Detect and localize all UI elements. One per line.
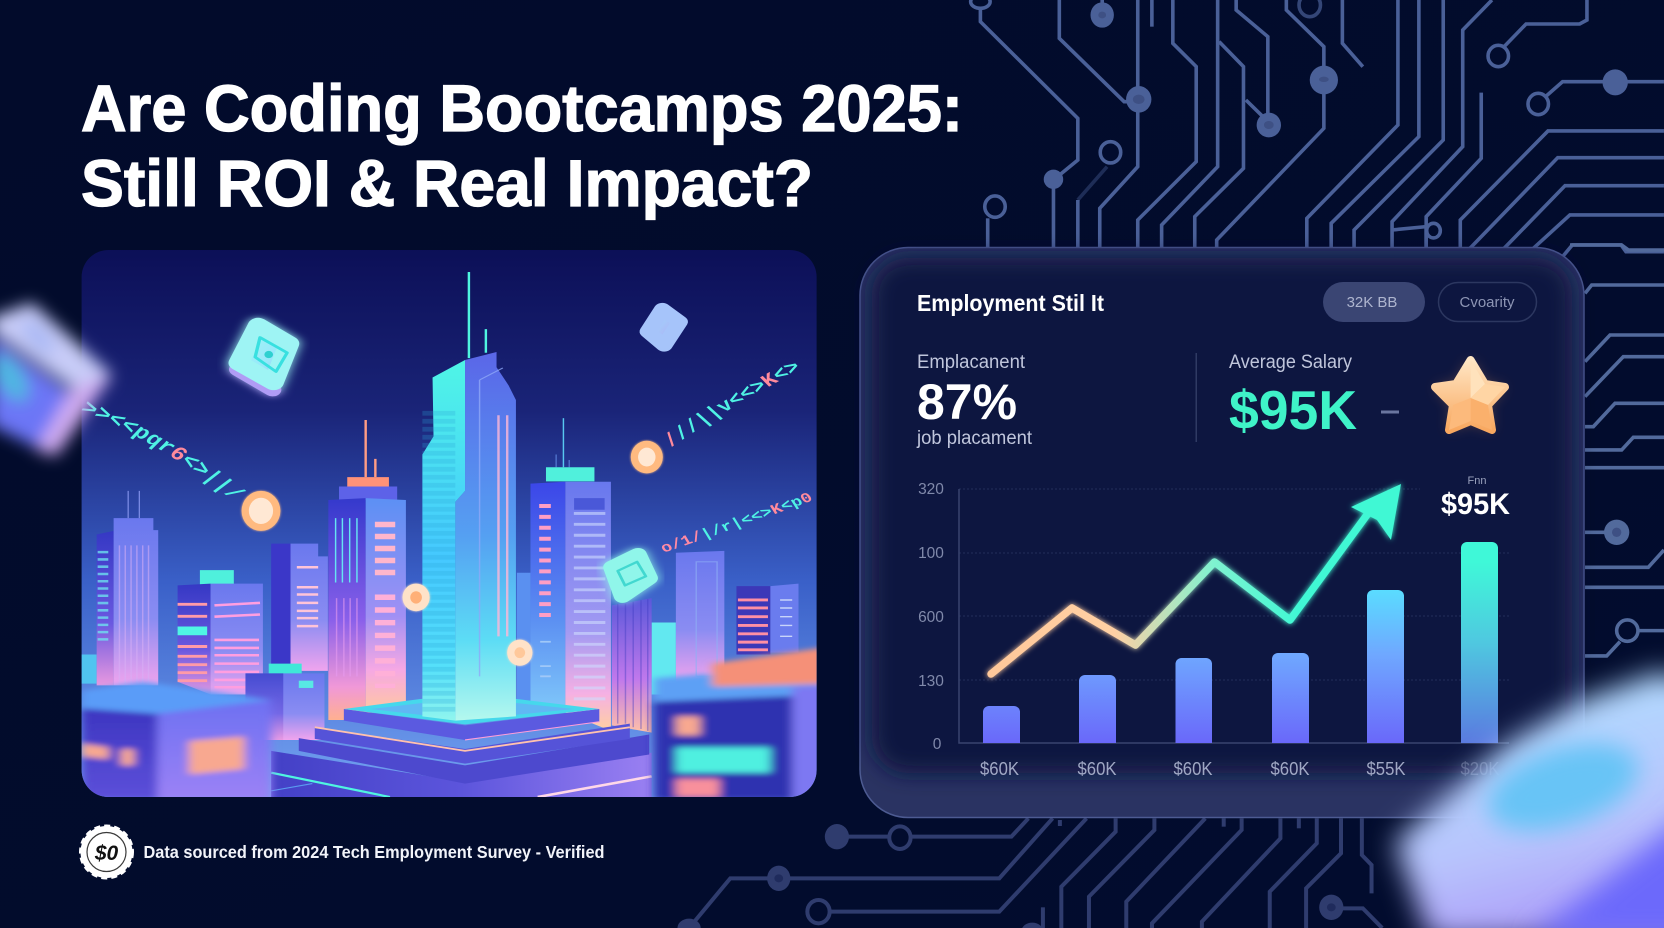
bars: [983, 542, 1498, 743]
stat: average salary: [1229, 352, 1399, 441]
pill filled: 32K BB: [1347, 294, 1397, 311]
y axis labels: 130: [918, 673, 944, 690]
back right buildings: [612, 551, 799, 733]
blurred foreground block left: [82, 682, 271, 800]
stat divider: [1196, 353, 1197, 442]
source text: Data sourced from 2024 Tech Employment Survey - Verified: [144, 842, 604, 862]
circuit traces: bottom: [677, 818, 1382, 928]
blurred floating cube bottom right: [1395, 672, 1664, 928]
x axis labels: $20K: [1460, 759, 1500, 779]
y axis labels: [918, 481, 944, 753]
x axis labels: $60K: [980, 759, 1019, 779]
floating chip small: [648, 309, 680, 345]
panel: employment card: [860, 248, 1584, 818]
panel: neon city illustration: [82, 250, 817, 797]
platform: [271, 699, 652, 800]
x axis labels: $60K: [1270, 759, 1310, 779]
circuit traces: right side: [1570, 245, 1664, 656]
sky: [70, 240, 830, 810]
small foreground building: [245, 664, 324, 740]
x axis labels: $60K: [1174, 759, 1212, 779]
right tower with teal roof: [517, 418, 611, 731]
code streams: o/1/|/r|<<>K<p0: [662, 493, 812, 552]
icon: star: [1435, 360, 1505, 430]
chart grid: [959, 489, 1509, 680]
code streams: >><<pqr6<>||/: [82, 401, 246, 496]
title: [81, 71, 963, 220]
icon: verified badge: $0: [94, 842, 118, 865]
central tower: [422, 272, 516, 721]
pill outline: Cvoarity: [1459, 294, 1515, 311]
card frame: [860, 248, 1584, 818]
stat: job placement: 87%: [917, 374, 1017, 430]
floating chip lower: [612, 555, 649, 596]
card heading: Employment Stil It: [917, 290, 1104, 316]
mid left building: [271, 544, 328, 671]
x axis labels: [980, 759, 1500, 779]
x axis labels: $60K: [1078, 759, 1116, 779]
pill outline: [1438, 282, 1536, 322]
code streams: ///||v<<>K<>: [667, 364, 798, 447]
y axis labels: 100: [918, 545, 944, 562]
x axis labels: $55K: [1366, 759, 1406, 779]
value callout: Fnn: [1468, 475, 1486, 487]
y axis labels: 600: [918, 609, 944, 626]
source note: [80, 826, 604, 878]
code streams: [82, 364, 812, 552]
glowing orbs: [242, 441, 663, 666]
trend arrow: [991, 484, 1401, 674]
chart axes: [959, 489, 1509, 743]
blurred floating cube left: [0, 303, 112, 456]
building with teal roof: [178, 570, 263, 694]
y axis labels: 320: [918, 481, 944, 498]
orange roof tower: [328, 420, 406, 720]
far left building: [82, 491, 158, 685]
stat: job placement: Emplacanent: [917, 352, 1026, 373]
floating chip: [238, 325, 289, 390]
circuit traces: top right: [971, 0, 1664, 257]
bar chart: [918, 475, 1510, 779]
stat: average salary: $95K: [1229, 379, 1357, 441]
stat: job placement: job placament: [916, 428, 1033, 449]
stat: average salary: Average Salary: [1229, 352, 1352, 373]
title: Still ROI & Real Impact?: [81, 146, 813, 220]
blurred foreground block right: [654, 647, 826, 800]
value callout: $95K: [1441, 488, 1510, 521]
title: Are Coding Bootcamps 2025:: [81, 71, 963, 145]
stat: job placement: [916, 352, 1033, 449]
y axis labels: 0: [933, 736, 942, 753]
pill filled: [1323, 282, 1425, 322]
icon: verified badge: [80, 826, 132, 878]
